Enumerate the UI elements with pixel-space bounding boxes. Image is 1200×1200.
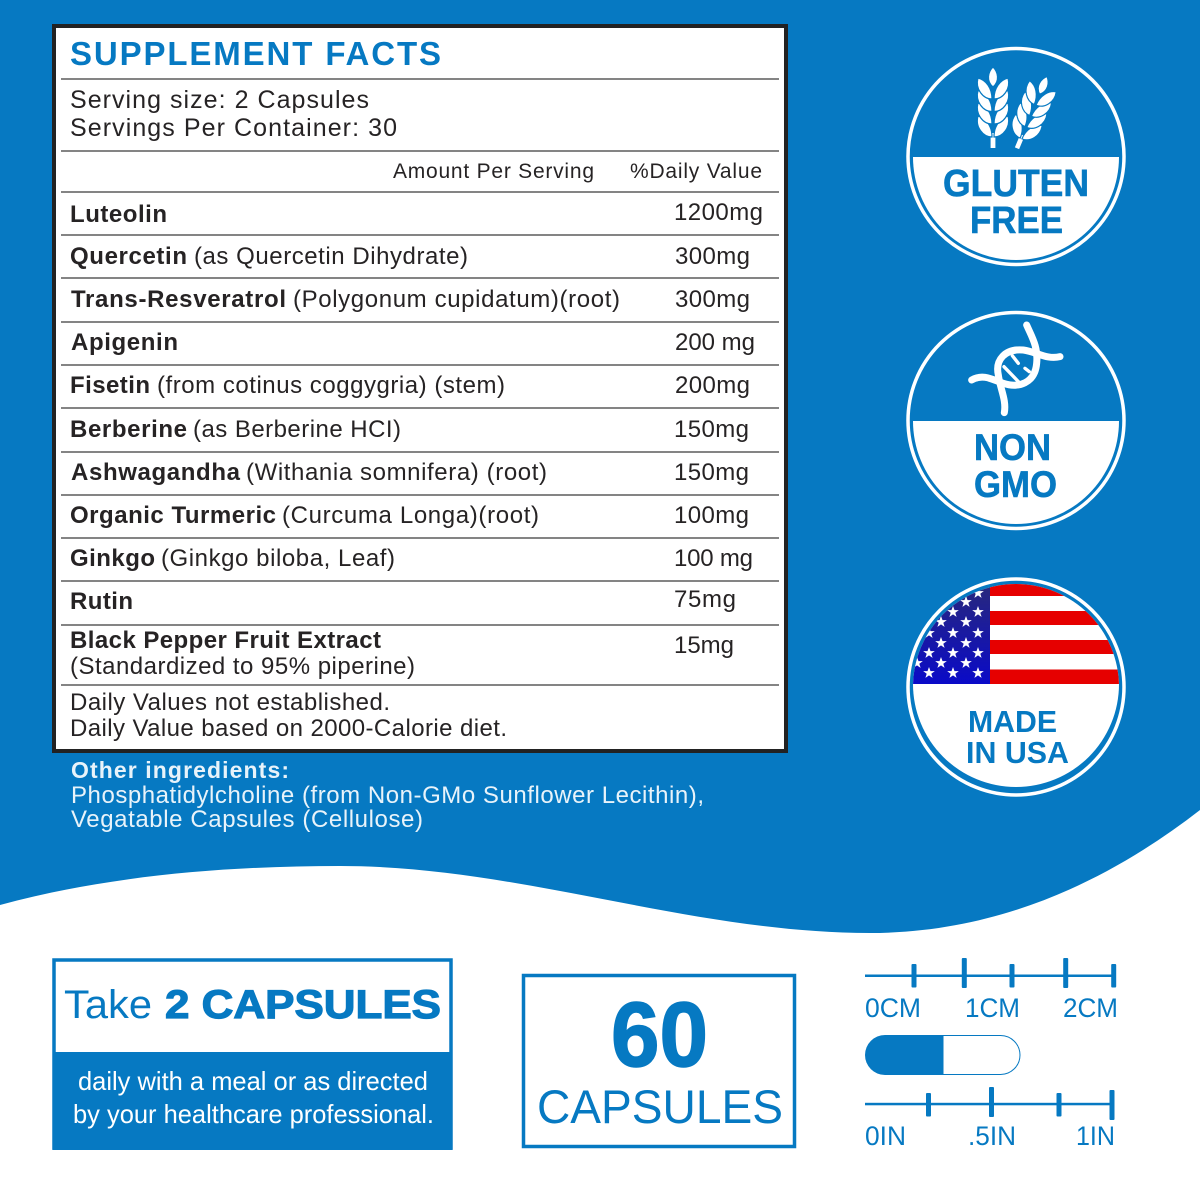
row: organic turmeric: 100mg [674,502,749,529]
row: luteolin: Luteolin [70,201,167,228]
serving information [70,86,397,142]
other ingredients: Phosphatidylcholine (from Non-GMo Sunflower Lecithin), [71,782,704,809]
row: quercetin: Quercetin [70,243,187,270]
footnote: Daily Values not established. [70,689,390,716]
row: trans-resveratrol [71,286,750,313]
column headings [393,160,762,183]
row: trans-resveratrol: 300mg [675,286,750,313]
row: ginkgo [70,545,753,572]
row: fisetin: (from cotinus coggygria) (stem) [157,372,505,399]
row: luteolin [70,199,763,228]
inch ruler: .5IN [968,1121,1016,1151]
count: 60: 60 [611,984,708,1086]
heading: take 2 capsules: 2 CAPSULES [165,983,441,1027]
inch ruler [865,1087,1115,1151]
row: organic turmeric [70,502,749,529]
row: ashwagandha: 150mg [674,459,749,486]
inch ruler: 0IN [865,1121,906,1151]
row: berberine [70,416,749,443]
row: rutin: Rutin [70,588,133,615]
title: supplement facts: SUPPLEMENT FACTS [70,35,441,72]
badge text: gluten free: GLUTEN [943,163,1089,205]
dosage directions: daily with a meal or as directed [78,1066,428,1096]
row: black pepper fruit extract: Black Pepper Fruit Extract [70,627,381,654]
other ingredients [71,757,704,833]
panel: dosage instructions [52,960,452,1150]
row: quercetin [70,243,750,270]
icon: wheat [977,67,1061,154]
footnote: Daily Value based on 2000-Calorie diet. [70,715,507,742]
column headings: Amount Per Serving [393,160,594,183]
row: berberine: Berberine [70,416,187,443]
row: black pepper fruit extract: 15mg [674,632,734,659]
dosage directions: by your healthcare professional. [73,1099,434,1129]
badge text: gluten free: FREE [970,200,1063,242]
centimetre ruler: 1CM [965,993,1020,1023]
row: rutin: 75mg [674,586,736,613]
row: black pepper fruit extract: (Standardized to 95% piperine) [70,653,415,680]
row: rutin [70,586,736,615]
icon: capsule [865,1035,1020,1075]
row: trans-resveratrol: Trans-Resveratrol [71,286,286,313]
heading: take 2 capsules [64,983,441,1027]
row: fisetin: 200mg [675,372,750,399]
other ingredients: Vegatable Capsules (Cellulose) [71,806,423,833]
badge: made in usa [908,579,1124,795]
heading: take 2 capsules: Take [64,983,152,1027]
badge text: non gmo: GMO [974,464,1057,505]
panel: supplement facts table [54,26,786,751]
row: fisetin [70,372,750,399]
badge text: non gmo: NON [974,427,1051,468]
row: fisetin: Fisetin [70,372,150,399]
badge text: made in usa: MADE [968,704,1057,739]
row: quercetin: (as Quercetin Dihydrate) [194,243,468,270]
centimetre ruler [865,958,1118,1023]
serving information: Servings Per Container: 30 [70,114,397,142]
footnote [70,689,507,742]
row: ashwagandha: Ashwagandha [71,459,241,486]
row: luteolin: 1200mg [674,199,763,226]
row: apigenin [71,329,755,356]
row: apigenin: Apigenin [71,329,178,356]
serving information: Serving size: 2 Capsules [70,86,369,114]
badge text: made in usa: IN USA [966,735,1069,770]
row: organic turmeric: Organic Turmeric [70,502,276,529]
inch ruler: 1IN [1076,1121,1115,1151]
row: berberine: (as Berberine HCI) [193,416,401,443]
row: ginkgo: (Ginkgo biloba, Leaf) [161,545,395,572]
row: ashwagandha: (Withania somnifera) (root) [246,459,547,486]
row: trans-resveratrol: (Polygonum cupidatum)(root) [293,286,620,313]
row: ashwagandha [71,459,749,486]
badge text: made in usa [966,704,1069,770]
row: ginkgo: 100 mg [674,545,753,572]
panel: 60 capsules [524,976,794,1146]
row: black pepper fruit extract [70,627,734,680]
row: quercetin: 300mg [675,243,750,270]
row: ginkgo: Ginkgo [70,545,155,572]
badge text: non gmo [974,427,1057,505]
icon: usa flag [911,580,1120,684]
icon: dna helix [972,325,1060,413]
dosage directions [73,1066,434,1129]
badge: gluten free [908,48,1124,264]
centimetre ruler: 2CM [1063,993,1118,1023]
centimetre ruler: 0CM [865,993,921,1023]
row: apigenin: 200 mg [675,329,755,356]
row: berberine: 150mg [674,416,749,443]
column headings: %Daily Value [630,160,762,183]
badge text: gluten free [943,163,1089,242]
row: organic turmeric: (Curcuma Longa)(root) [282,502,539,529]
badge: non gmo [908,312,1124,528]
other ingredients: Other ingredients: [71,757,289,783]
label: capsules: CAPSULES [537,1080,783,1133]
